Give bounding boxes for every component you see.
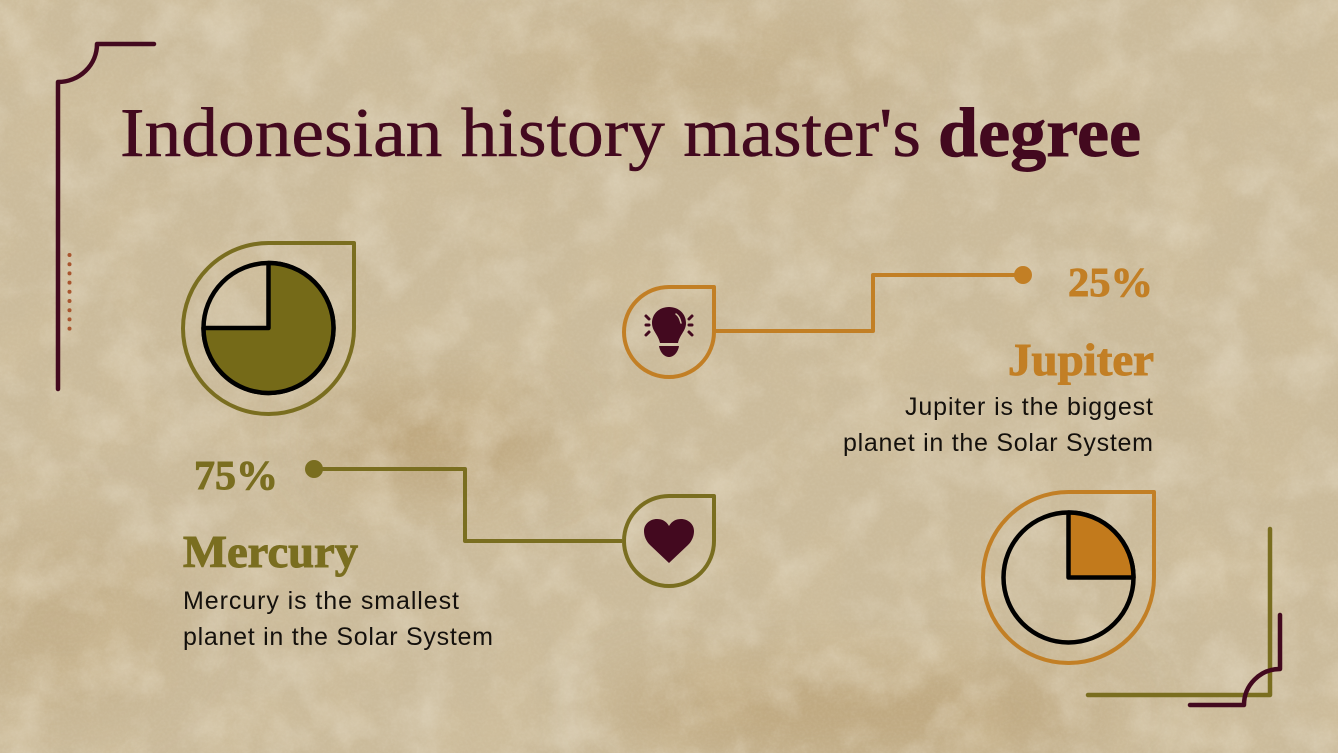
text block: Jupiter xyxy=(843,259,1154,457)
percentage: 75%: 75% xyxy=(194,452,278,498)
teardrop outline: Mercury xyxy=(183,243,354,414)
description: Mercury: planet in the Solar System xyxy=(183,623,493,651)
heading: Jupiter: Jupiter xyxy=(1008,335,1154,385)
connector: Jupiter xyxy=(715,266,1032,331)
pie chart: 75 percent xyxy=(204,263,334,393)
title: degree xyxy=(938,95,1141,172)
teardrop icon: heart xyxy=(624,496,714,586)
decorative dotted line xyxy=(68,253,72,331)
icon: lightbulb xyxy=(646,307,692,357)
icon: heart xyxy=(644,519,694,563)
heading: Mercury: Mercury xyxy=(183,527,359,577)
pie chart: 25 percent xyxy=(1004,512,1134,642)
connector: Mercury xyxy=(305,460,622,541)
description: Mercury: Mercury is the smallest xyxy=(183,587,459,615)
panel: Jupiter pie chart, 25% xyxy=(983,492,1154,663)
teardrop icon: lightbulb xyxy=(624,287,714,377)
decorative frame: top-left corner xyxy=(58,44,154,389)
panel: Mercury pie chart, 75% xyxy=(183,243,354,414)
title: Indonesian history master's xyxy=(120,95,921,172)
description: Jupiter xyxy=(843,393,1153,457)
description: Jupiter: planet in the Solar System xyxy=(843,429,1153,457)
percentage: 25%: 25% xyxy=(1068,259,1153,305)
text block: Mercury xyxy=(183,452,493,651)
teardrop outline: Jupiter xyxy=(983,492,1154,663)
decorative frame: bottom-right corner xyxy=(1088,529,1280,705)
description: Mercury xyxy=(183,587,493,651)
description: Jupiter: Jupiter is the biggest xyxy=(905,393,1153,421)
